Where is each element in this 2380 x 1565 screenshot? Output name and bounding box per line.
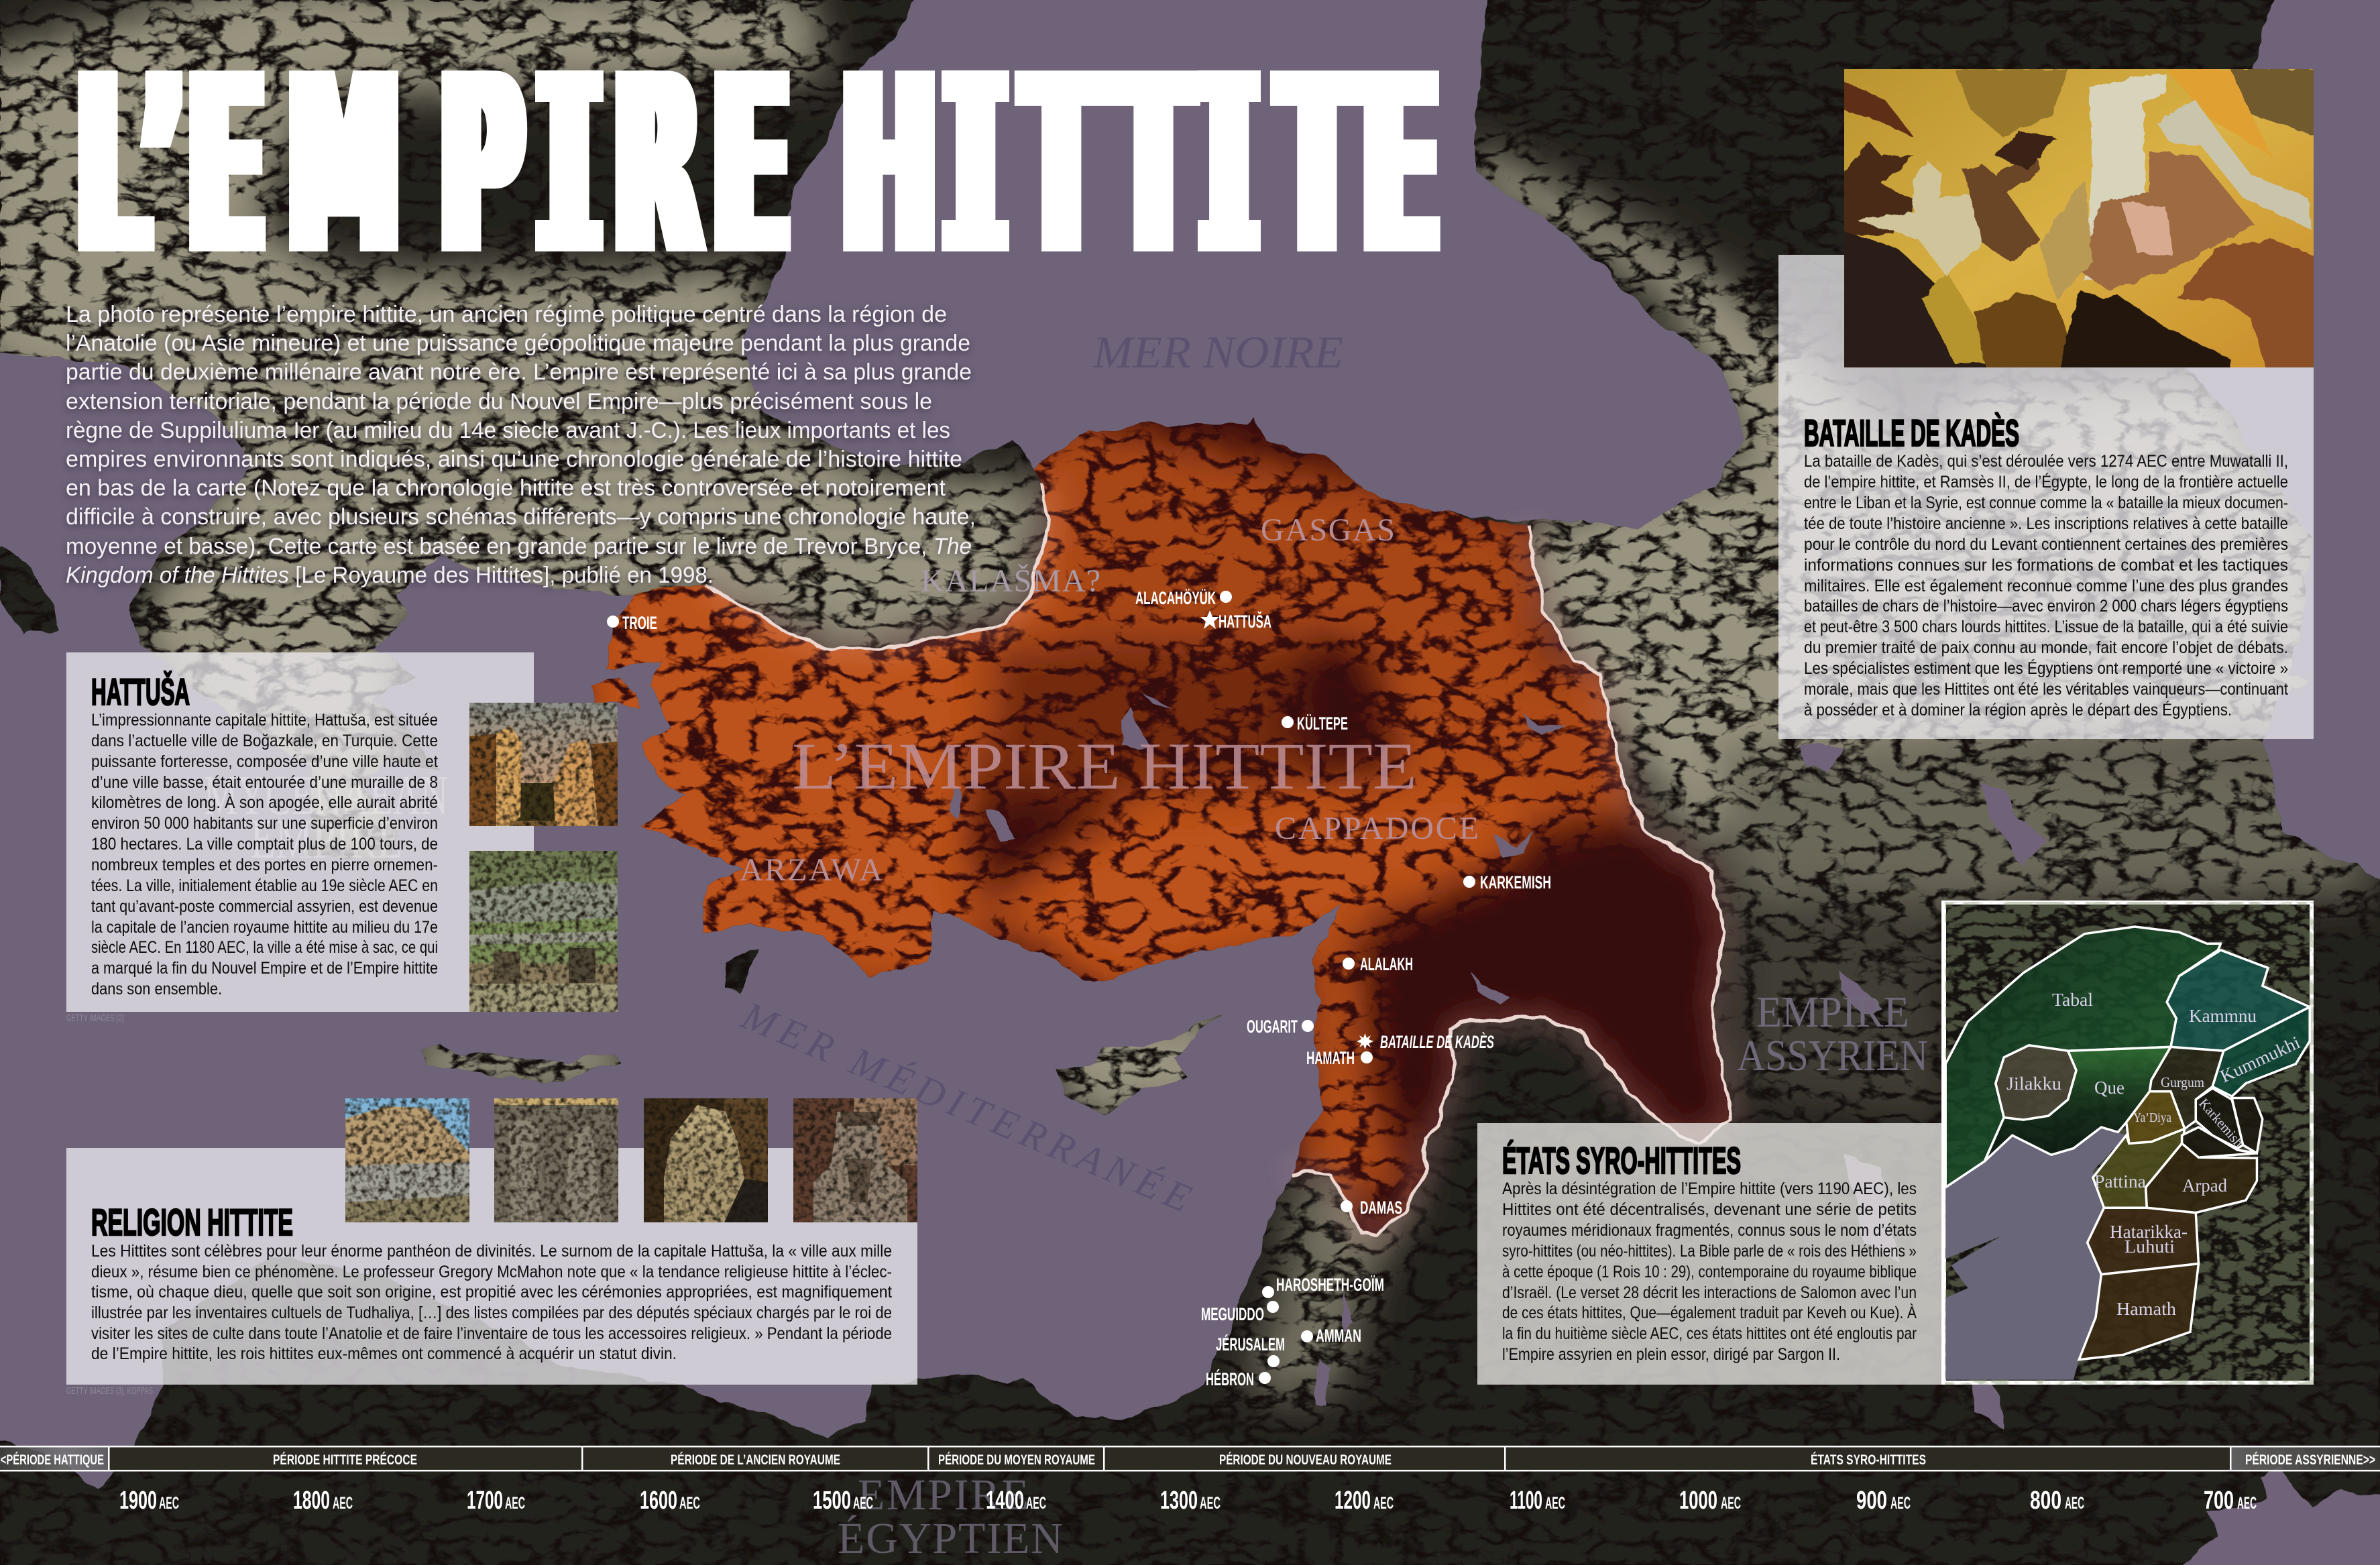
timeline year labels: AEC (1026, 1494, 1046, 1513)
caption: Getty credit: GETTY IMAGES (2) (66, 1012, 124, 1024)
city: Meguiddo (1201, 1301, 1279, 1324)
text: Hattuša body: dans son ensemble. (91, 980, 222, 998)
timeline period bar: PÉRIODE DU MOYEN ROYAUME (938, 1452, 1095, 1468)
inset region: Kummukhi (2212, 1007, 2310, 1096)
map label: mer mediterranee: MER MÉDITERRANÉE (735, 993, 1197, 1221)
text: Hattuša body: 180 hectares. La ville comptait plus de 100 tours, de (91, 835, 438, 854)
city: Troie (607, 613, 657, 633)
timeline year labels: 1300 (1160, 1487, 1198, 1515)
city: Ougarit: OUGARIT (1247, 1017, 1298, 1037)
city: Amman (1301, 1326, 1361, 1346)
city: Hamath: HAMATH (1306, 1048, 1355, 1068)
text: religion body: illustrée par les inventaires cultuels de Tudhaliya, […] des listes compilées par des députés spéciaux chargés par le roi de (91, 1303, 892, 1322)
inset region: Tabal (1945, 927, 2221, 1187)
city: Jérusalem: JÉRUSALEM (1216, 1334, 1285, 1354)
caption: Getty credit: GETTY IMAGES (3), KOPPAS (66, 1385, 153, 1397)
timeline year labels: 1400 (986, 1487, 1024, 1515)
map label: l'empire hittite: L’EMPIRE HITTITE (792, 729, 1417, 803)
text: Hattuša body: d’une ville basse, était entourée d’une muraille de 8 (91, 773, 438, 792)
map label: gasgas: GASGAS (1261, 512, 1395, 548)
timeline year labels: 1600 (640, 1487, 677, 1515)
inset region: Karkemish (2196, 1088, 2243, 1149)
timeline year labels: AEC (159, 1494, 179, 1513)
panel: Hattuša (66, 652, 618, 1024)
timeline year labels: AEC (1200, 1494, 1221, 1513)
timeline year labels: 1100 (1510, 1487, 1542, 1515)
inset region: Arpad (2146, 1143, 2257, 1213)
photo: city ruins (469, 851, 618, 1012)
photo: stone stele (494, 1098, 618, 1222)
city: Hattusa capital star: HATTUŠA (1219, 611, 1271, 632)
city: Amman: AMMAN (1316, 1326, 1361, 1346)
city: Alalakh (1343, 954, 1413, 974)
inset labels: Tabal (2052, 990, 2093, 1010)
inset sea (1945, 1127, 2127, 1380)
timeline year labels: 1800 (293, 1487, 330, 1515)
text: Hattuša body (91, 711, 438, 998)
map label: empire assyrien (1737, 988, 1928, 1080)
text: Kadès body: du premier traité de paix connu au monde, fait encore l’objet de débats. (1804, 638, 2288, 657)
inset labels: Kummukhi (2217, 1032, 2304, 1086)
inset labels: Gurgum (2161, 1074, 2204, 1090)
city: Jérusalem (1216, 1334, 1285, 1367)
timeline year labels: 900 (1856, 1487, 1887, 1515)
text: Hattuša body: tées. La ville, initialement établie au 19e siècle AEC en (91, 876, 438, 895)
photo: rock relief (345, 1098, 469, 1222)
text: Hattuša body: nombreux temples et des portes en pierre ornemen- (91, 856, 438, 874)
intro text: La photo représente l’empire hittite, un ancien régime politique centré dans la région de (66, 302, 947, 327)
inset region: Que (1984, 1047, 2171, 1161)
text: états body (1502, 1179, 1917, 1364)
text: Hattuša body: puissante forteresse, composée d’une ville haute et (91, 752, 438, 771)
inset labels: Luhuti (2124, 1236, 2175, 1257)
faint label: Mycenaean empire: EMPIRE (250, 808, 402, 870)
inset labels: Kammnu (2189, 1006, 2257, 1026)
inset texture (1946, 905, 2310, 1381)
timeline year labels: AEC (333, 1494, 353, 1513)
text: Kadès body: et peut-être 3 500 chars lourds hittites. L’issue de la bataille, qui a été suivie (1804, 618, 2288, 636)
map label: kalasma: KALAŠMA? (921, 563, 1100, 599)
text: Kadès body: militaires. Elle est également reconnue comme l’une des plus grandes (1804, 577, 2288, 595)
timeline year labels: 1900 (119, 1487, 157, 1515)
intro text: Kingdom of the Hittites [Le Royaume des Hittites], publié en 1998. (66, 563, 714, 588)
inset labels: Ya’Diya (2133, 1110, 2171, 1125)
city: Meguiddo: MEGUIDDO (1201, 1304, 1264, 1324)
inset map: syro-hittite states (1941, 901, 2314, 1385)
city: Kültepe (1282, 713, 1348, 734)
map label: empire egyptien: ÉGYPTIEN (838, 1514, 1063, 1563)
timeline (0, 1446, 2380, 1515)
inset labels: Jilakku (2006, 1074, 2062, 1094)
text: Hattuša body: dans l’actuelle ville de Boğazkale, en Turquie. Cette (91, 732, 438, 750)
map label: empire assyrien: ASSYRIEN (1737, 1031, 1928, 1080)
city markers (607, 588, 1551, 1389)
intro text: empires environnants sont indiqués, ainsi qu’une chronologie générale de l’histoire hittite (66, 447, 962, 472)
text: Kadès body: informations connues sur les formations de combat et les tactiques (1804, 556, 2288, 575)
faint label: Mycenaean empire: MYCENAEAN (204, 764, 448, 827)
text: Kadès body: de l’empire hittite, et Ramsès II, de l’Égypte, le long de la frontière actuelle (1804, 472, 2288, 491)
text: Kadès body: entre le Liban et la Syrie, est connue comme la « bataille la mieux documen- (1804, 494, 2288, 512)
inset region: Hatarikka-Luhuti (2088, 1208, 2198, 1275)
timeline year labels: AEC (679, 1494, 700, 1513)
intro text: extension territoriale, pendant la période du Nouvel Empire—plus précisément sous le (66, 389, 932, 414)
timeline year labels: AEC (1545, 1494, 1565, 1513)
intro text: difficile à construire, avec plusieurs schémas différents—y compris une chronologie haute, (66, 504, 976, 530)
inset region: Kammnu (2167, 950, 2310, 1051)
text: Kadès body: Les spécialistes estiment que les Égyptiens ont remporté une « victoire » (1804, 658, 2288, 678)
panel: religion hittite (66, 1098, 917, 1397)
text: Kadès body: La bataille de Kadès, qui s’est déroulée vers 1274 AEC entre Muwatalli II, (1804, 452, 2288, 471)
text: états body: syro-hittites (ou néo-hittites). La Bible parle de « rois des Héthiens » (1502, 1242, 1917, 1261)
timeline period bar: PÉRIODE DU NOUVEAU ROYAUME (1219, 1452, 1392, 1468)
text: Kadès body: tée de toute l’histoire ancienne ». Les inscriptions relatives à cette bataille (1804, 514, 2288, 533)
city: Alacahöyük: ALACAHÖYÜK (1135, 588, 1216, 608)
empire territory (536, 389, 1744, 1261)
text: états body: royaumes méridionaux fragmentés, connus sous le nom d’états (1502, 1221, 1917, 1240)
photo: bearded statue (793, 1098, 917, 1222)
lakes and gulfs (950, 693, 2380, 1565)
inset region: Jilakku (1996, 1045, 2076, 1120)
text: Hattuša body: L’impressionnante capitale hittite, Hattuša, est située (91, 711, 438, 730)
map label: empire egyptien: EMPIRE (858, 1470, 1029, 1519)
inset region: Gurgum (2149, 1047, 2224, 1129)
inset labels: Hatarikka- (2110, 1222, 2188, 1242)
text: Hattuša body: a marqué la fin du Nouvel Empire et de l’Empire hittite (91, 959, 438, 978)
heading: religion: RELIGION HITTITE (91, 1201, 293, 1243)
timeline year labels: 800 (2030, 1487, 2061, 1515)
intro text: l’Anatolie (ou Asie mineure) et une puissance géopolitique majeure pendant la plus grande (66, 331, 970, 356)
text: Hattuša body: siècle AEC. En 1180 AEC, la ville a été mise à sac, ce qui (91, 938, 438, 957)
battle marker: Bataille de Kadès (1357, 1031, 1494, 1052)
text: religion body: visiter les sites de culte dans toute l’Anatolie et de faire l’inventaire de tous les accessoires religieux. » Pendant la période (91, 1324, 892, 1343)
map label: empire assyrien: EMPIRE (1756, 988, 1909, 1037)
timeline year labels (119, 1487, 2257, 1515)
text: états body: Après la désintégration de l’Empire hittite (vers 1190 AEC), les (1502, 1179, 1917, 1198)
timeline year labels: AEC (853, 1494, 873, 1513)
text: états body: la fin du huitième siècle AEC, ces états hittites ont été engloutis par (1502, 1324, 1917, 1343)
text: religion body: Les Hittites sont célèbres pour leur énorme panthéon de divinités. Le surnom de la capitale Hattuša, la « ville aux mille (91, 1242, 892, 1261)
map label: empire egyptien (838, 1470, 1063, 1563)
timeline period bar: PÉRIODE DE L’ANCIEN ROYAUME (671, 1452, 840, 1468)
photo: statue head (644, 1098, 768, 1222)
text: Hattuša body: la capitale de l’ancien royaume hittite au milieu du 17e (91, 918, 438, 937)
city: Alalakh: ALALAKH (1360, 954, 1413, 974)
text: Hattuša body: kilomètres de long. À son apogée, elle aurait abrité (91, 793, 438, 812)
inset region: Hamath (2079, 1264, 2198, 1360)
inset labels: Pattina (2094, 1171, 2146, 1192)
inset labels: Hamath (2116, 1299, 2177, 1319)
text: états body: l’Empire assyrien en plein essor, dirigé par Sargon II. (1502, 1345, 1840, 1364)
timeline year labels: AEC (1890, 1494, 1911, 1513)
timeline year labels: 1000 (1679, 1487, 1717, 1515)
panel: bataille de Kadès (1778, 59, 2328, 739)
map label: arzawa: ARZAWA (740, 852, 883, 888)
heading: états syro-hittites: ÉTATS SYRO-HITTITES (1502, 1139, 1741, 1181)
photo: gate statues (469, 703, 618, 826)
timeline year labels: AEC (1721, 1494, 1741, 1513)
city: Harosheth-Goïm (1262, 1275, 1384, 1298)
intro text: partie du deuxième millénaire avant notre ère. L’empire est représenté ici à sa plus grande (66, 359, 972, 385)
timeline year labels: AEC (505, 1494, 525, 1513)
inset region: east pocket (2232, 1098, 2263, 1153)
text: Kadès body (1804, 452, 2288, 719)
text: religion body (91, 1242, 892, 1363)
battle marker: Bataille de Kadès: BATAILLE DE KADÈS (1380, 1031, 1494, 1052)
text: religion body: de l’Empire hittite, les rois hittites eux-mêmes ont commencé à acquérir un statut divin. (91, 1344, 677, 1363)
inset labels: Que (2094, 1078, 2124, 1098)
panel: états syro-hittites (1477, 1123, 1941, 1385)
text: Kadès body: batailles de chars de l’histoire—avec environ 2 000 chars légers égyptiens (1804, 597, 2288, 616)
text: états body: Hittites ont été décentralisés, devenant une série de petits (1502, 1200, 1917, 1219)
intro text: en bas de la carte (Notez que la chronologie hittite est très controversée et notoirement (66, 475, 946, 501)
text: Kadès body: pour le contrôle du nord du Levant contiennent certaines des premières (1804, 535, 2288, 554)
faint label: Mycenaean empire (204, 764, 448, 870)
painting: battle of Kadesh (1833, 59, 2328, 382)
inset labels: Karkemish (2196, 1095, 2247, 1151)
timeline year labels: AEC (1373, 1494, 1394, 1513)
city: Harosheth-Goïm: HAROSHETH-GOÏM (1276, 1275, 1384, 1295)
inset labels: Arpad (2182, 1175, 2227, 1196)
timeline year labels: AEC (2237, 1494, 2257, 1513)
map label: mer noire: MER NOIRE (1092, 327, 1343, 378)
title: L’EMPIRE HITTITE (77, 21, 1439, 310)
text: Kadès body: à posséder et à dominer la région après le départ des Égyptiens. (1804, 700, 2232, 719)
city: Hébron: HÉBRON (1206, 1369, 1254, 1389)
heading: Kadès: BATAILLE DE KADÈS (1804, 412, 2019, 454)
timeline year labels: AEC (2065, 1494, 2084, 1513)
text: Kadès body: morale, mais que les Hittites ont été les véritables vainqueurs—continuant (1804, 680, 2288, 699)
map label: cappadoce: CAPPADOCE (1275, 811, 1479, 846)
city: Troie: TROIE (622, 613, 657, 633)
timeline year labels: 700 (2204, 1487, 2234, 1515)
timeline year labels: 1700 (467, 1487, 503, 1515)
timeline year labels: 1500 (813, 1487, 851, 1515)
text: états body: d’Israël. (Le verset 28 décrit les interactions de Salomon avec l’un (1502, 1283, 1917, 1302)
text: Hattuša body: tant qu’avant-poste commercial assyrien, est devenue (91, 897, 438, 916)
inset region: south pocket (2182, 1127, 2257, 1157)
inset region: Pattina (2093, 1129, 2185, 1208)
timeline period bar: ÉTATS SYRO-HITTITES (1811, 1452, 1926, 1468)
text: états body: de ces états hittites, Que—également traduit par Keveh ou Kue). À (1502, 1303, 1917, 1322)
text: Hattuša body: environ 50 000 habitants sur une superficie d’environ (91, 814, 438, 833)
intro text: règne de Suppiluliuma Ier (au milieu du 14e siècle avant J.-C.). Les lieux importants et les (66, 418, 950, 443)
timeline period bar: PÉRIODE HITTITE PRÉCOCE (273, 1452, 417, 1468)
city: Hattusa capital star (1200, 610, 1271, 632)
city: Kültepe: KÜLTEPE (1297, 713, 1348, 734)
city: Damas: DAMAS (1360, 1198, 1402, 1218)
text: états body: à cette époque (1 Rois 10 : 29), contemporaine du royaume biblique (1502, 1263, 1917, 1281)
intro text (66, 302, 976, 588)
timeline period bar (0, 1446, 2380, 1471)
inset region: Ya'Diya (2127, 1092, 2185, 1143)
timeline year labels: 1200 (1335, 1487, 1371, 1515)
inset labels (2006, 990, 2304, 1319)
city: Damas (1341, 1198, 1402, 1218)
intro text: moyenne et basse). Cette carte est basée en grande partie sur le livre de Trevor Bryce, The (66, 534, 972, 559)
city: Karkemish (1463, 872, 1551, 892)
city: Karkemish: KARKEMISH (1480, 872, 1551, 892)
heading: Hattuša: HATTUŠA (91, 671, 190, 713)
text: religion body: dieux », résume bien ce phénomène. Le professeur Gregory McMahon note que « la tendance religieuse hittite à l’éclec- (91, 1263, 892, 1281)
text: religion body: tisme, où chaque dieu, quelle que soit son origine, est propitié avec les cérémonies appropriées, est magnifiquement (91, 1283, 892, 1301)
